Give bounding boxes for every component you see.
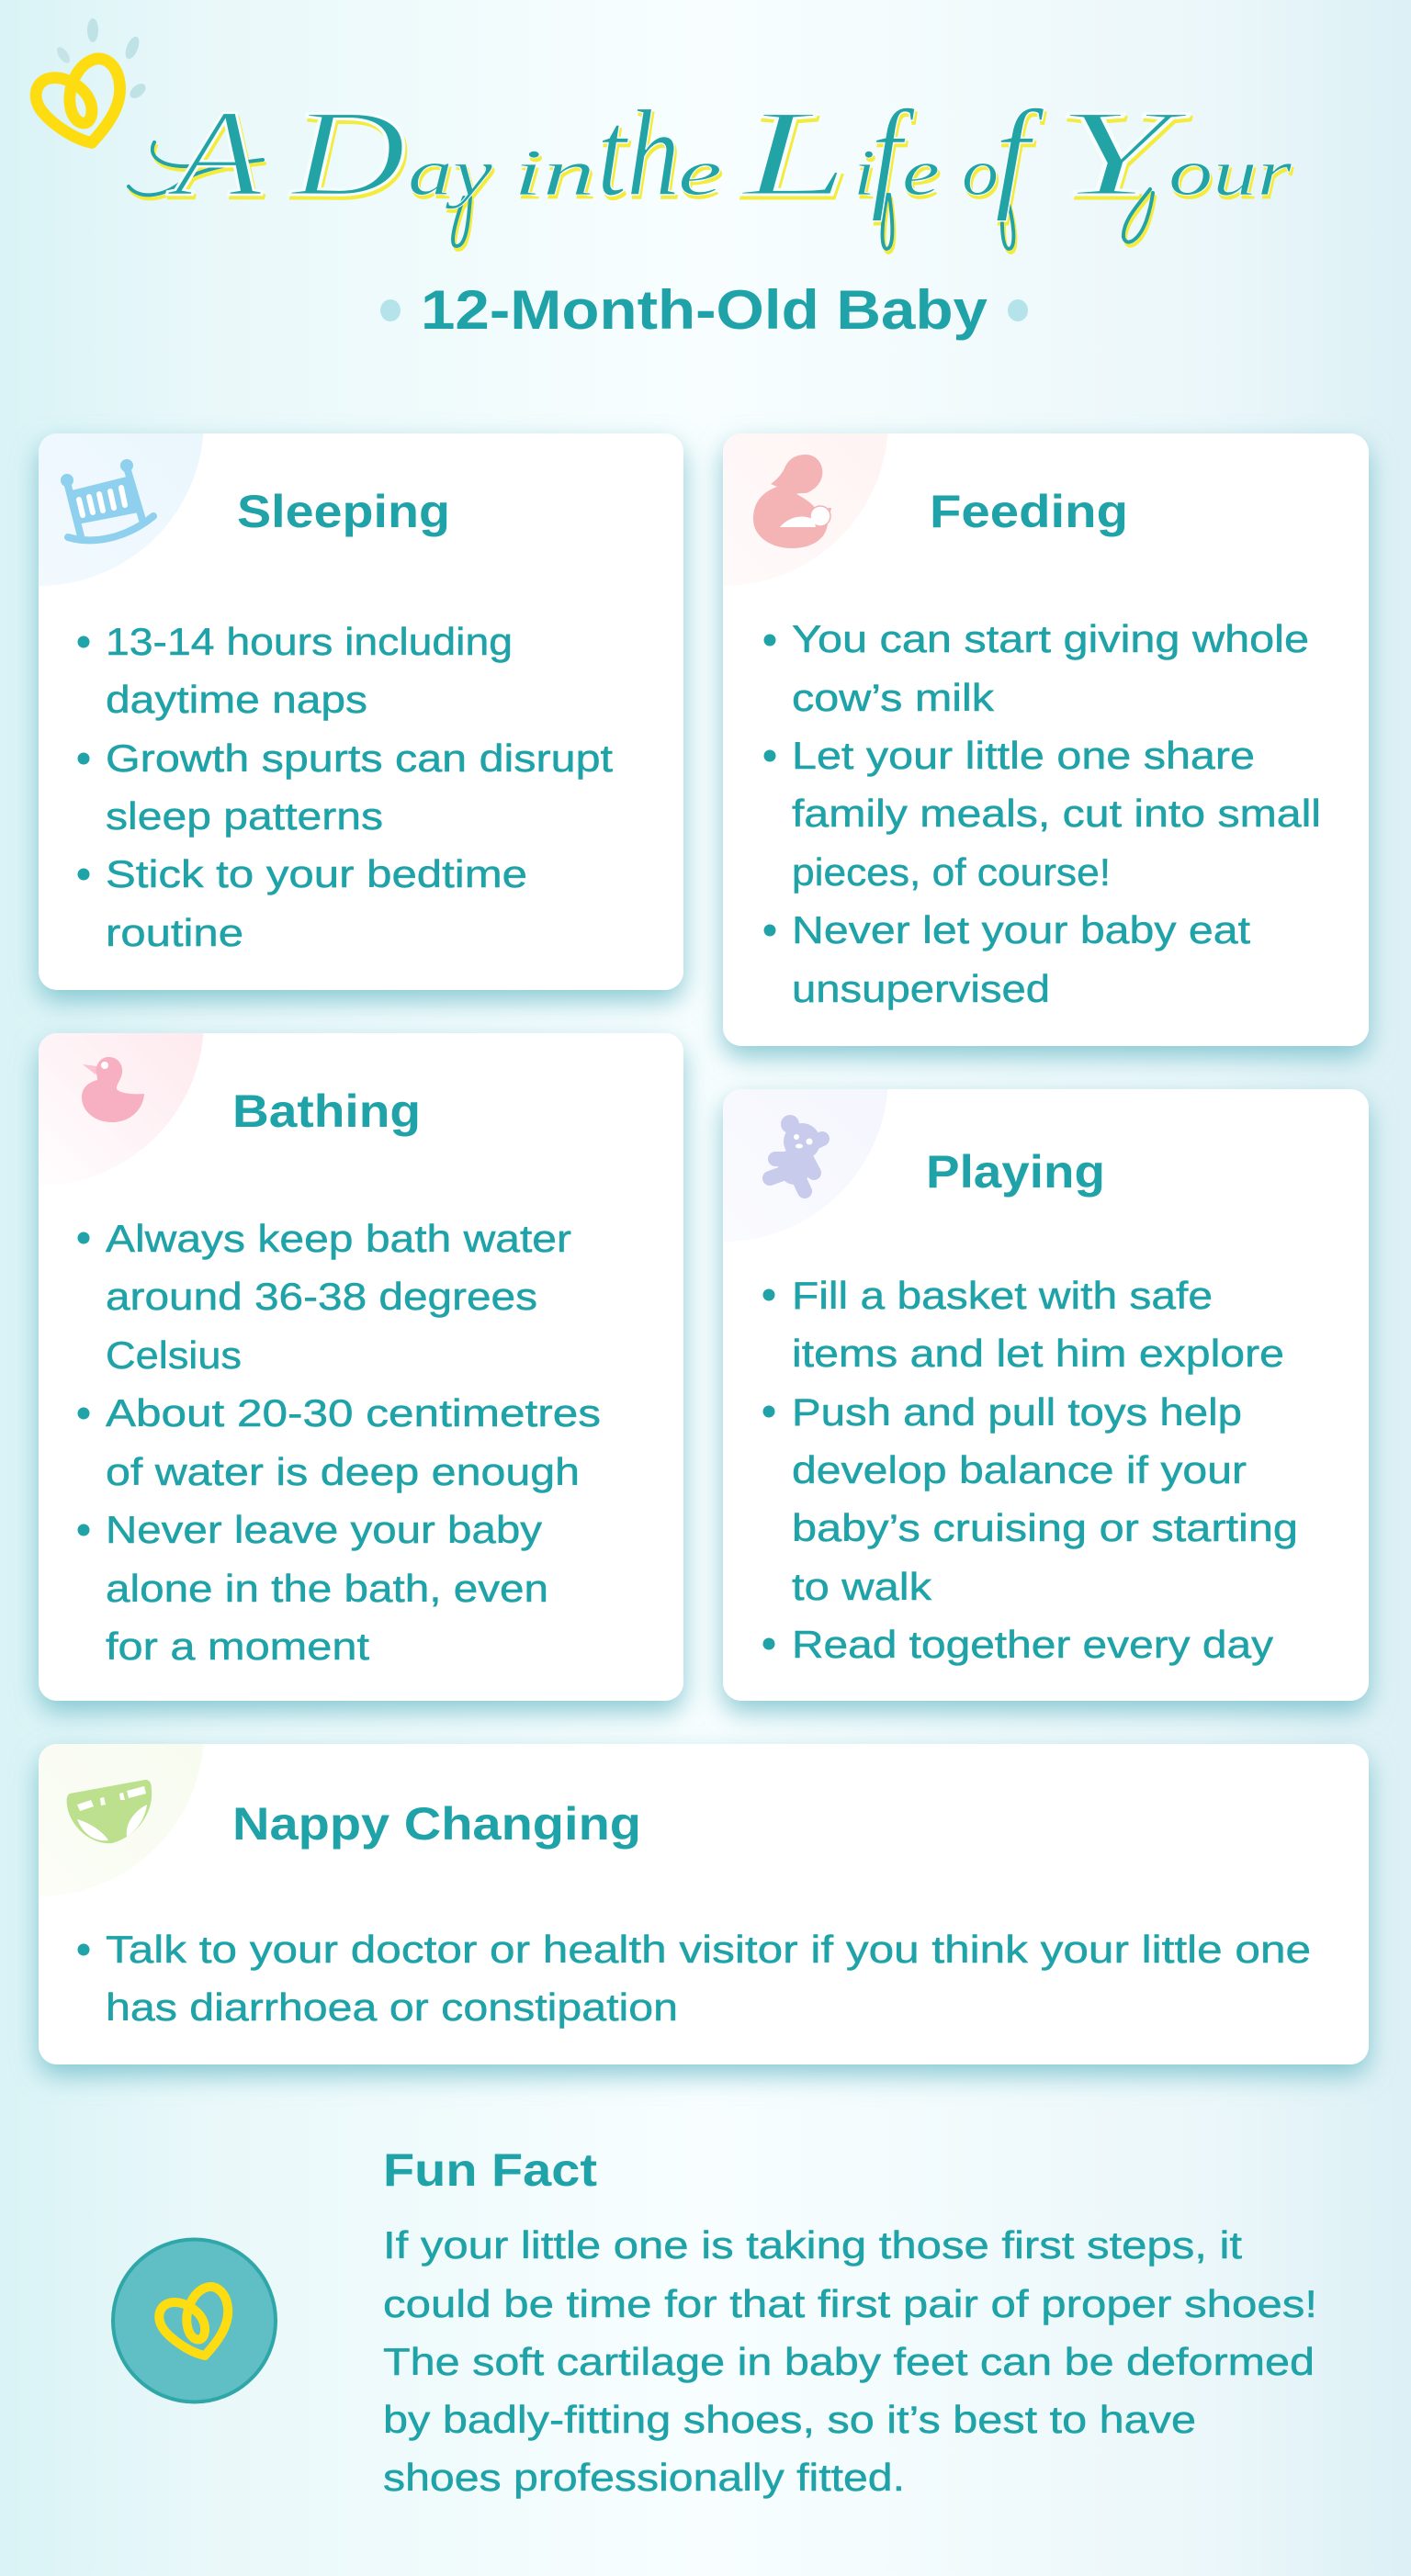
list: playing: Push and pull toys help bbox=[792, 1390, 1242, 1434]
title: o bbox=[962, 136, 999, 209]
heading: playing: Playing bbox=[926, 1146, 1105, 1198]
list: nappy changing: has diarrhoea or constipation bbox=[106, 1985, 678, 2029]
icon: fun fact heart badge bbox=[113, 2239, 276, 2402]
list: playing: develop balance if your bbox=[792, 1448, 1247, 1491]
list: sleeping: sleep patterns bbox=[106, 794, 383, 838]
list: bathing: Always keep bath water bbox=[106, 1217, 571, 1260]
list: bathing bbox=[77, 1217, 601, 1668]
title: th bbox=[597, 85, 680, 222]
list: sleeping bbox=[77, 620, 613, 954]
list: playing: Fill a basket with safe bbox=[792, 1274, 1213, 1317]
fun fact text: shoes professionally fitted. bbox=[383, 2456, 905, 2499]
list: nappy changing: Talk to your doctor or health visitor if you think your little one bbox=[106, 1928, 1311, 1971]
list: playing: Read together every day bbox=[792, 1623, 1273, 1666]
list: bathing: for a moment bbox=[106, 1625, 369, 1668]
panel: sleeping bbox=[22, 427, 701, 1018]
list: playing: baby’s cruising or starting bbox=[792, 1506, 1298, 1549]
fun fact text: The soft cartilage in baby feet can be deformed bbox=[383, 2340, 1315, 2383]
list: sleeping: routine bbox=[106, 911, 243, 954]
list: feeding: Let your little one share bbox=[792, 734, 1255, 777]
title: f bbox=[995, 85, 1045, 222]
title: f bbox=[871, 85, 916, 222]
list: feeding: unsupervised bbox=[792, 967, 1050, 1010]
list: feeding: You can start giving whole bbox=[792, 617, 1309, 660]
heading: sleeping: Sleeping bbox=[237, 486, 450, 537]
list: sleeping: Stick to your bedtime bbox=[106, 852, 527, 895]
list: feeding: pieces, of course! bbox=[792, 850, 1111, 894]
title: e bbox=[678, 136, 722, 209]
list: bathing: Never leave your baby bbox=[106, 1508, 542, 1551]
title bbox=[129, 85, 1292, 249]
fun fact text: by badly-fitting shoes, so it’s best to have bbox=[383, 2398, 1196, 2441]
list: sleeping: daytime naps bbox=[106, 678, 367, 721]
heading: nappy changing: Nappy Changing bbox=[232, 1798, 641, 1850]
title: in bbox=[514, 136, 595, 209]
list: playing bbox=[762, 1274, 1298, 1666]
list: playing: to walk bbox=[792, 1565, 932, 1608]
title: L bbox=[739, 85, 849, 222]
list: feeding: cow’s milk bbox=[792, 676, 995, 719]
list: bathing: of water is deep enough bbox=[106, 1450, 580, 1493]
icon: mother and baby bbox=[753, 455, 831, 548]
list: bathing: around 36-38 degrees bbox=[106, 1275, 537, 1318]
heading: feeding: Feeding bbox=[930, 486, 1128, 537]
title: ay bbox=[408, 136, 492, 209]
title: Y bbox=[1055, 85, 1190, 222]
icon: rubber duck bbox=[82, 1057, 144, 1122]
list: bathing: About 20-30 centimetres bbox=[106, 1391, 601, 1434]
title: i bbox=[853, 136, 875, 209]
panel: bathing bbox=[22, 1027, 701, 1729]
subtitle: 12-Month-Old Baby bbox=[421, 279, 988, 341]
list: playing: items and let him explore bbox=[792, 1332, 1284, 1375]
list: sleeping: Growth spurts can disrupt bbox=[106, 737, 613, 780]
icon: teddy bear bbox=[770, 1115, 822, 1191]
icon: cradle bbox=[61, 459, 153, 540]
title: A bbox=[166, 85, 263, 222]
title: D bbox=[288, 85, 406, 222]
list: nappy changing bbox=[77, 1928, 1311, 2029]
heading: bathing: Bathing bbox=[232, 1086, 421, 1137]
list: bathing: alone in the bath, even bbox=[106, 1567, 548, 1610]
logo: heart with drops bbox=[36, 18, 149, 142]
panel: feeding bbox=[706, 427, 1385, 1074]
list: feeding bbox=[764, 617, 1321, 1010]
fun fact text bbox=[383, 2223, 1317, 2499]
list: feeding: Never let your baby eat bbox=[792, 908, 1250, 951]
list: feeding: family meals, cut into small bbox=[792, 792, 1321, 835]
fun fact text: could be time for that first pair of proper shoes! bbox=[383, 2282, 1317, 2325]
panel: playing bbox=[706, 1084, 1385, 1729]
panel: nappy changing bbox=[22, 1738, 1385, 2093]
fun fact text: If your little one is taking those first steps, it bbox=[383, 2223, 1242, 2267]
title: e bbox=[902, 136, 940, 209]
icon: nappy bbox=[67, 1780, 152, 1843]
title: our bbox=[1168, 136, 1292, 209]
list: sleeping: 13-14 hours including bbox=[106, 620, 513, 663]
list: bathing: Celsius bbox=[106, 1333, 242, 1377]
fun fact heading: Fun Fact bbox=[383, 2144, 597, 2196]
